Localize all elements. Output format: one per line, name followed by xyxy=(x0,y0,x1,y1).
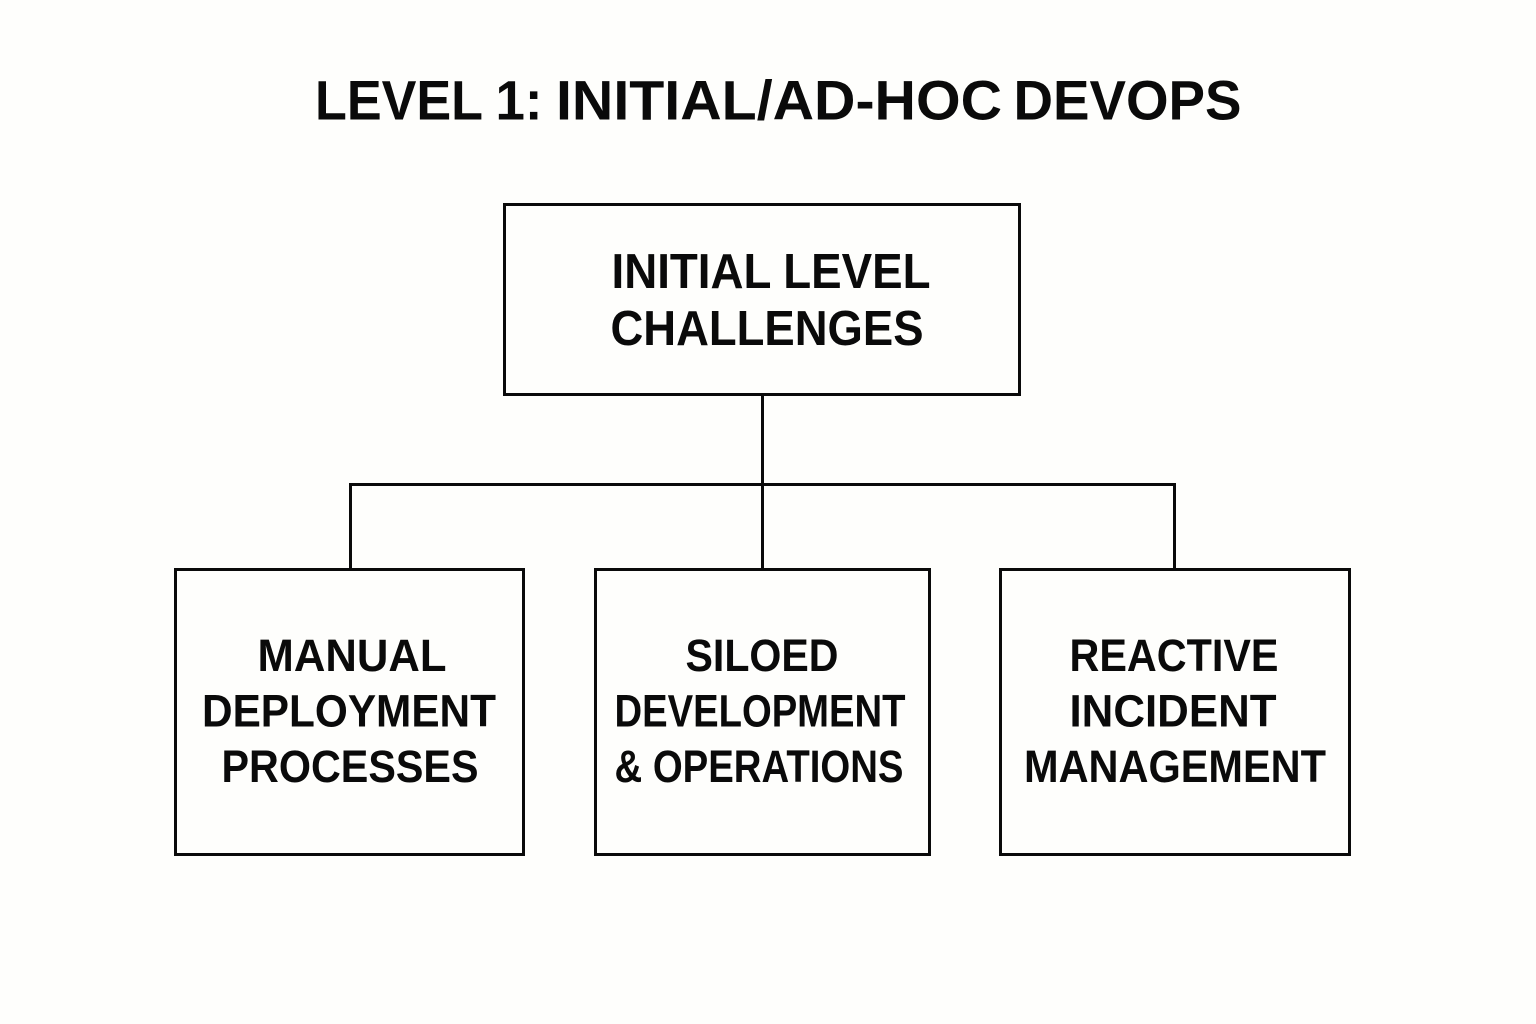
panel: reactive incident management: MANAGEMENT xyxy=(1024,741,1326,792)
title: INITIAL/AD-HOC xyxy=(556,68,1002,132)
title: DEVOPS xyxy=(1014,68,1242,132)
title xyxy=(315,68,1242,132)
title: 1: xyxy=(496,68,542,132)
panel: initial level challenges: INITIAL LEVEL xyxy=(612,245,930,299)
title: LEVEL xyxy=(315,68,483,132)
panel: initial level challenges xyxy=(504,204,1020,394)
connector: tree lines xyxy=(350,396,1174,568)
panel: reactive incident management: INCIDENT xyxy=(1070,686,1276,736)
panel: siloed development and operations: & OPERATIONS xyxy=(614,741,904,792)
panel: manual deployment processes: DEPLOYMENT xyxy=(202,686,496,736)
panel: manual deployment processes xyxy=(176,570,524,854)
panel: initial level challenges: CHALLENGES xyxy=(610,302,924,356)
panel: manual deployment processes: MANUAL xyxy=(258,630,446,681)
panel: reactive incident management: REACTIVE xyxy=(1070,630,1278,681)
panel: siloed development and operations xyxy=(596,570,930,854)
panel: reactive incident management xyxy=(1000,570,1350,854)
panel: manual deployment processes: PROCESSES xyxy=(222,741,478,792)
panel: siloed development and operations: DEVELOPMENT xyxy=(614,686,906,736)
panel: siloed development and operations: SILOED xyxy=(686,630,838,681)
